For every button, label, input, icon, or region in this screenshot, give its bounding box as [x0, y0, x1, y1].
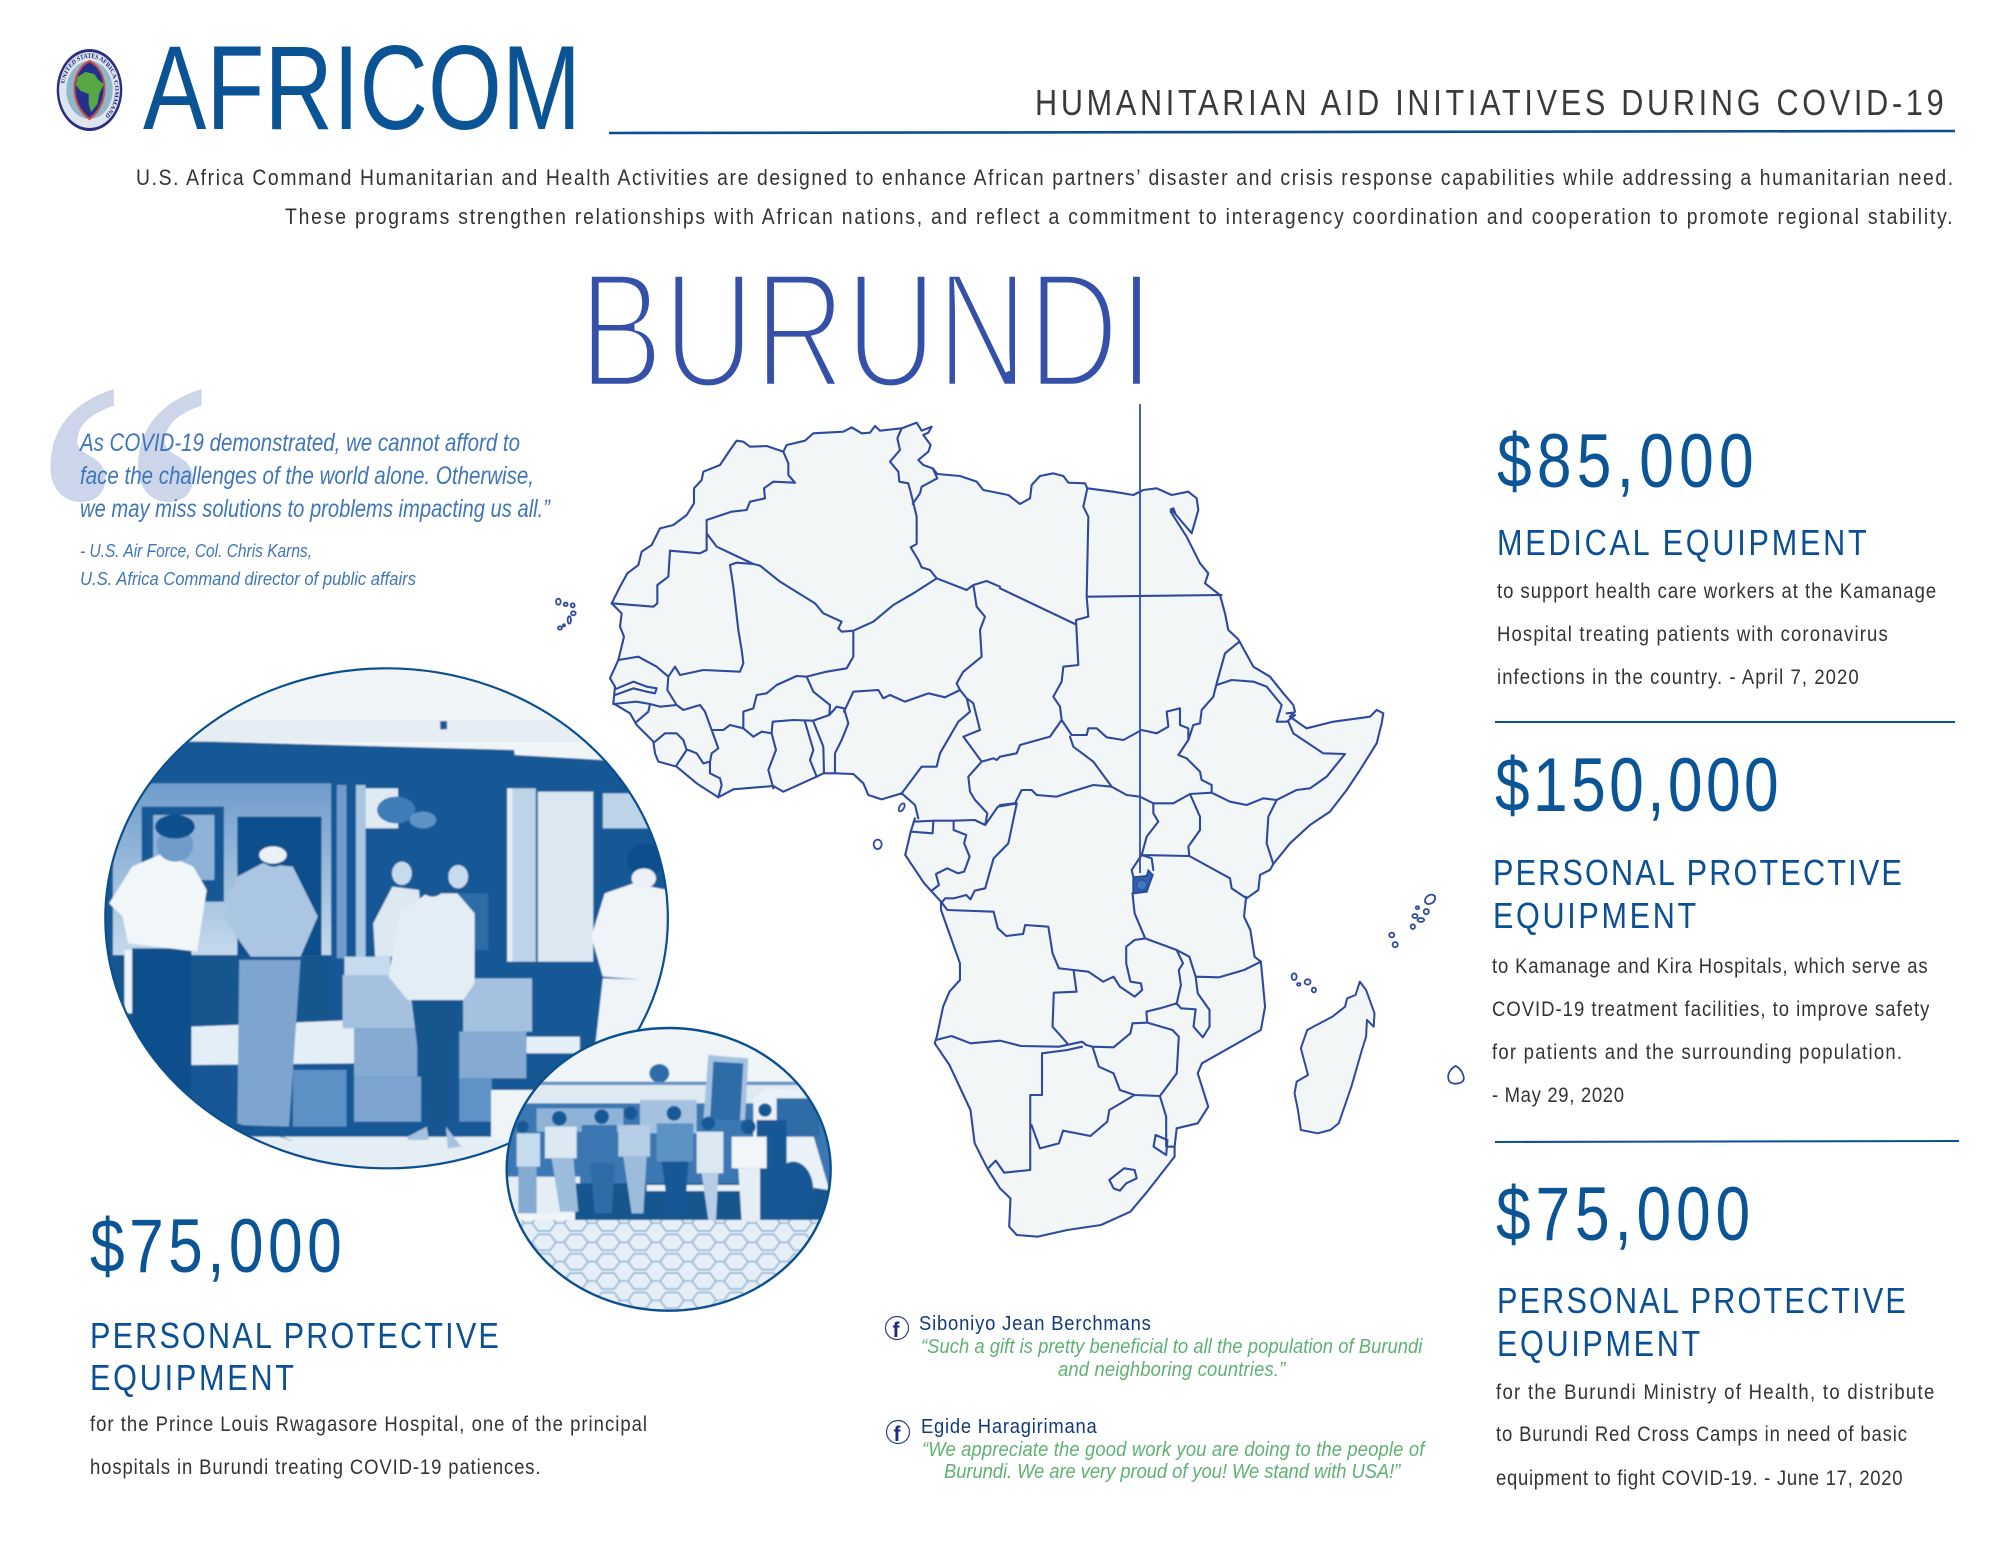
panel: $85,000 medical equipment — [1497, 418, 1936, 689]
quote: COVID-19 demonstrated: U.S. Africa Command director of public affairs — [80, 569, 416, 589]
testimonial: Egide Haragirimana — [886, 1416, 1426, 1483]
panel: $75,000 Prince Louis Rwagasore Hospital: PERSONAL PROTECTIVE — [90, 1317, 499, 1357]
photo: officials with donated boxes — [90, 660, 690, 1180]
group of people — [517, 1103, 787, 1222]
quote: COVID-19 demonstrated: face the challenges of the world alone. Otherwise, — [80, 462, 534, 490]
Madagascar — [1295, 982, 1375, 1133]
panel: $75,000 Prince Louis Rwagasore Hospital: $75,000 — [90, 1203, 342, 1288]
intro text: These programs strengthen relationships with African nations, and reflect a commitment to interagency coordination and cooperation to promote regional stability. — [285, 205, 1953, 229]
sub-image: left officer — [109, 815, 207, 1092]
testimonial: Egide Haragirimana: “We appreciate the good work you are doing to the people of — [922, 1439, 1426, 1461]
sub-image: second officer — [222, 818, 318, 1142]
pointer line to Burundi — [1139, 404, 1141, 873]
panel: $75,000 PPE Ministry of Health: for the Burundi Ministry of Health, to distribute — [1496, 1381, 1934, 1404]
testimonial: Egide Haragirimana: Burundi. We are very proud of you! We stand with USA!” — [944, 1461, 1402, 1483]
panel: $75,000 Prince Louis Rwagasore Hospital — [90, 1203, 647, 1479]
panel: $150,000 PPE Kamanage and Kira: $150,000 — [1495, 742, 1779, 827]
panel: $75,000 PPE Ministry of Health: PERSONAL PROTECTIVE — [1497, 1282, 1906, 1322]
map: central and southern Africa outlines — [905, 800, 1464, 1237]
quote: COVID-19 demonstrated: As COVID-19 demonstrated, we cannot afford to — [78, 429, 520, 457]
icon: Facebook: f — [894, 1423, 902, 1446]
icon: Facebook: f — [892, 1319, 900, 1342]
heading: BURUNDI: BURUNDI — [579, 238, 1154, 422]
panel: $150,000 PPE Kamanage and Kira: to Kamanage and Kira Hospitals, which serve as — [1492, 955, 1928, 978]
truck — [702, 1054, 828, 1192]
panel: $85,000 medical equipment: $85,000 — [1497, 418, 1754, 503]
subtitle: humanitarian aid initiatives: HUMANITARIAN AID INITIATIVES DURING COVID-19 — [1035, 84, 1944, 124]
highlighted country: Burundi — [1133, 871, 1153, 893]
panel: $85,000 medical equipment: MEDICAL EQUIPMENT — [1497, 524, 1867, 564]
panel: $75,000 PPE Ministry of Health — [1496, 1171, 1934, 1490]
logo: AFRICOM seal: UNITED STATES AFRICA COMMAND — [60, 53, 119, 118]
title: AFRICOM: AFRICOM — [143, 21, 581, 155]
panel: $75,000 Prince Louis Rwagasore Hospital: EQUIPMENT — [90, 1359, 294, 1399]
icon: Facebook — [886, 1316, 908, 1342]
sub-image: people behind — [373, 862, 488, 957]
quote: COVID-19 demonstrated: - U.S. Air Force, Col. Chris Karns, — [80, 541, 312, 561]
icon: Facebook — [886, 1420, 910, 1446]
quote: COVID-19 demonstrated — [78, 429, 551, 589]
sub-image: white tables and boxes — [191, 957, 580, 1140]
sub-image: central woman — [389, 857, 475, 1148]
panel: $75,000 PPE Ministry of Health: EQUIPMENT — [1497, 1325, 1700, 1365]
borders: west and north Africa — [612, 428, 1000, 800]
testimonial: Siboniyo Jean Berchmans: Siboniyo Jean Berchmans — [919, 1313, 1151, 1335]
map: north-east Africa outlines — [1000, 473, 1383, 898]
panel: $75,000 Prince Louis Rwagasore Hospital: for the Prince Louis Rwagasore Hospital, one of the principal — [90, 1413, 647, 1436]
intro text — [136, 166, 1953, 229]
testimonial: Siboniyo Jean Berchmans: “Such a gift is pretty beneficial to all the population of Burundi — [921, 1336, 1423, 1358]
map of Africa — [556, 404, 1464, 1237]
intro text: U.S. Africa Command Humanitarian and Health Activities are designed to enhance African partners’ disaster and crisis response capabilities while addressing a humanitarian need. — [136, 166, 1953, 190]
photo: group in front of truck — [500, 1020, 840, 1320]
panel: $150,000 PPE Kamanage and Kira: EQUIPMENT — [1493, 897, 1696, 937]
panel: $85,000 medical equipment: infections in the country. - April 7, 2020 — [1497, 666, 1859, 689]
borders: central and southern Africa — [912, 800, 1261, 1191]
panel: $75,000 Prince Louis Rwagasore Hospital: hospitals in Burundi treating COVID-19 patiences. — [90, 1456, 541, 1479]
sub-image: right officer — [591, 843, 668, 1047]
testimonial: Siboniyo Jean Berchmans — [886, 1313, 1423, 1381]
panel: $75,000 PPE Ministry of Health: $75,000 — [1496, 1171, 1750, 1256]
panel: $150,000 PPE Kamanage and Kira: - May 29, 2020 — [1492, 1084, 1624, 1107]
islands: Comoros, Seychelles, Mauritius — [1292, 893, 1464, 1084]
map: land fill — [610, 423, 1383, 1237]
panel: $75,000 PPE Ministry of Health: to Burundi Red Cross Camps in need of basic — [1496, 1423, 1907, 1446]
panel: $150,000 PPE Kamanage and Kira: for patients and the surrounding population. — [1492, 1041, 1902, 1064]
testimonial: Siboniyo Jean Berchmans: and neighboring countries.” — [1058, 1359, 1287, 1381]
quote: COVID-19 demonstrated: we may miss solutions to problems impacting us all.” — [80, 495, 551, 523]
islands: Cape Verde, Bioko, Sao Tome — [556, 599, 906, 849]
borders: north-east Africa — [1000, 488, 1345, 898]
panel: $150,000 PPE Kamanage and Kira: COVID-19 treatment facilities, to improve safety — [1492, 998, 1929, 1021]
panel: $150,000 PPE Kamanage and Kira: PERSONAL PROTECTIVE — [1493, 854, 1902, 894]
map: west and north Africa outlines — [556, 423, 1040, 849]
panel: $75,000 PPE Ministry of Health: equipment to fight COVID-19. - June 17, 2020 — [1496, 1467, 1903, 1490]
panel: $85,000 medical equipment: Hospital treating patients with coronavirus — [1497, 623, 1888, 646]
testimonial: Egide Haragirimana: Egide Haragirimana — [921, 1416, 1097, 1438]
panel: $85,000 medical equipment: to support health care workers at the Kamanage — [1497, 580, 1936, 603]
quote mark: “ — [30, 290, 219, 777]
panel: $150,000 PPE Kamanage and Kira — [1492, 742, 1929, 1107]
